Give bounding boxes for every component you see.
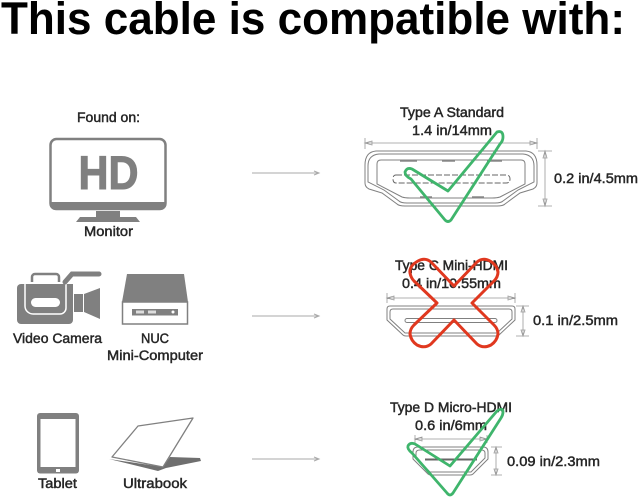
icon: red cross — [410, 259, 498, 347]
label: ultrabook: Ultrabook — [123, 476, 187, 491]
label: type D width: 0.6 in/6mm — [415, 418, 487, 433]
diagram: type C connector — [387, 293, 529, 336]
label: video camera: Video Camera — [13, 331, 102, 346]
icon: green check A — [405, 132, 503, 222]
label: tablet: Tablet — [38, 476, 77, 491]
label: mini-computer: Mini-Computer — [107, 348, 204, 363]
label: type C height: 0.1 in/2.5mm — [533, 313, 618, 328]
heading: found on: Found on: — [77, 110, 140, 125]
icon: monitor — [50, 139, 166, 222]
icon: video camera — [17, 274, 100, 324]
arrow: row 2 — [252, 314, 319, 318]
arrow: row 3 — [252, 457, 319, 461]
label: NUC: NUC — [141, 331, 169, 346]
label: type A height: 0.2 in/4.5mm — [554, 171, 638, 186]
icon: tablet — [37, 413, 79, 474]
label: type C name: Type C Mini-HDMI — [395, 258, 508, 273]
icon: NUC mini computer — [122, 274, 188, 324]
label: type D height: 0.09 in/2.3mm — [507, 454, 600, 469]
icon: ultrabook — [109, 418, 201, 471]
label: type A name: Type A Standard — [400, 105, 504, 120]
arrow: row 1 — [252, 171, 319, 175]
diagram: type D connector — [413, 435, 502, 475]
icon: monitor: HD — [78, 146, 138, 199]
label: type A width: 1.4 in/14mm — [412, 123, 492, 138]
label: monitor: Monitor — [84, 224, 134, 239]
label: type D name: Type D Micro-HDMI — [390, 400, 512, 415]
label: type C width: 0.4 in/10.55mm — [402, 276, 501, 291]
diagram: type A connector — [365, 138, 552, 206]
icon: green check D — [408, 409, 503, 495]
